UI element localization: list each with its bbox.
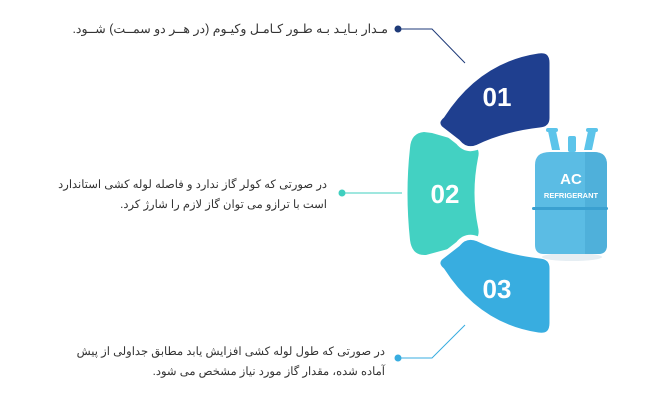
segment 03 xyxy=(438,237,552,335)
connector 2 xyxy=(338,190,402,196)
icon: refrigerant cylinder: AC xyxy=(560,171,582,188)
text: item 1: مـدار بـایـد بـه طـور کـامـل وکیـوم (در هــر دو سمــت) شــود. xyxy=(72,22,388,36)
connector 3 xyxy=(394,325,465,362)
connector 1 xyxy=(394,26,465,63)
segment 01: 01 xyxy=(483,82,511,112)
segment 03: 03 xyxy=(483,274,511,304)
icon: refrigerant cylinder xyxy=(532,128,608,261)
text: item 3 xyxy=(77,346,386,378)
text: item 3: در صورتی که طول لوله کشی افزایش یابد مطابق جداولی از پیش xyxy=(77,346,385,358)
text: item 2: است با ترازو می توان گاز لازم را شارژ کرد. xyxy=(120,199,327,211)
text: item 2 xyxy=(58,178,327,211)
segment 02 xyxy=(408,132,479,255)
text: item 3: آماده شده، مقدار گاز مورد نیاز مشخص می شود. xyxy=(153,366,385,378)
segment 01 xyxy=(438,51,552,149)
segment 02: 02 xyxy=(431,179,459,209)
icon: refrigerant cylinder: REFRIGERANT xyxy=(544,191,598,200)
text: item 2: در صورتی که کولر گاز ندارد و فاصله لوله کشی استاندارد xyxy=(58,179,327,191)
